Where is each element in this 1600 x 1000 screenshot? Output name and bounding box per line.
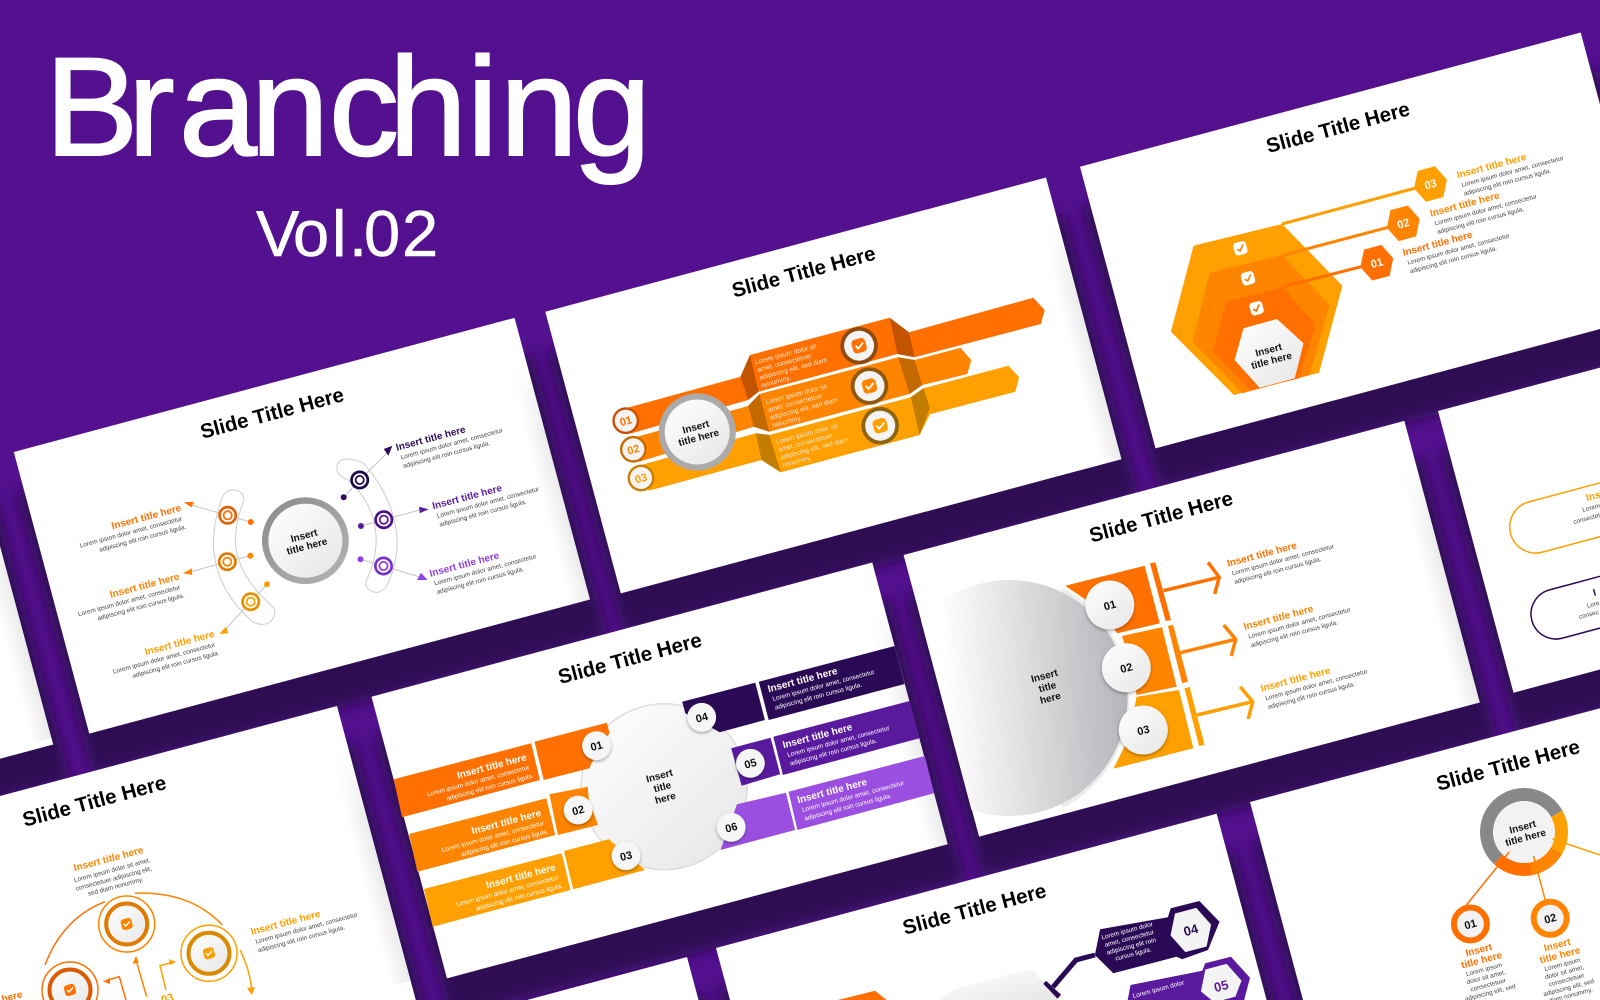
branch text 01: Lorem ipsum [1465,962,1503,978]
bar text right: Insert title here [796,777,869,806]
callout 04: 04 [1182,921,1200,939]
right text block: Lorem ipsum dolor amet, consectetur [255,911,359,946]
number badges: 03 [619,849,634,864]
band body text: nonummy. [761,375,792,389]
right text blocks [395,415,543,597]
center circle: Insert [681,419,711,436]
bar text left: Insert title here [456,752,528,781]
purple pill: Lore [1586,600,1600,610]
number circles: 02 [1119,661,1134,676]
slide title: Slide Title Here [729,242,878,302]
band body text: amet, consectetuer [767,392,824,414]
nested hexagons [1171,224,1342,395]
orange bars [394,723,645,927]
number rings: 02 [1543,912,1558,927]
arrowheads [183,446,429,634]
band 03 [641,366,1019,491]
big circle [581,704,747,870]
right text blocks: Lorem ipsum dolor amet, consectetur [436,486,541,520]
bar text left: Insert title here [485,862,557,891]
bar text left: adipiscing elit roin cursus ligula. [475,882,564,913]
text blocks: adipiscing elit roin cursus ligula. [1234,556,1322,586]
center hexagon: Insert [1254,342,1284,359]
band body text: adipiscing elit, sed diam [780,436,850,461]
branch text 02: consectetuer [1548,972,1586,988]
branch text 01: title here [1460,950,1504,971]
bar text right: adipiscing elit roin cursus ligula. [789,738,878,768]
bar text right: Lorem ipsum dolor amet, consectetur [801,780,906,814]
band body text: adipiscing elit, sed diam [769,397,839,422]
number rings [1454,902,1567,940]
band body text [755,341,852,469]
band body text: Lorem ipsum dolor sit [765,383,828,406]
center circle [262,497,349,584]
purple bars [682,646,934,850]
slide: half circle with arrows [892,421,1480,837]
connector [1044,955,1095,997]
right text blocks: Insert title here [395,424,467,454]
bar text left: adipiscing elit roin cursus ligula. [460,828,549,858]
callout 04: Lorem ipsum dolor [1101,921,1155,941]
text blocks: adipiscing elit roin cursus ligula. [1409,245,1498,275]
text blocks: Insert title here [1402,230,1474,259]
target nodes [218,470,393,611]
slide: circle with six bars [372,563,948,978]
slide title: Slide Title Here [556,629,704,689]
slide: off-canvas bottom slide [527,957,698,1000]
bar text left: Insert title here [470,808,543,837]
band body text: nonummy. [782,454,813,469]
branch lines [1466,839,1600,905]
main title: Branching [45,28,651,185]
top text block: Lorem ipsum dolor sit amet, [73,857,152,884]
flow arcs [45,893,252,1000]
slide title: Slide Title Here [20,771,169,832]
slide: hexagon callouts [716,814,1267,1000]
text blocks: Lorem ipsum dolor amet, consectetur [1461,155,1565,189]
slide: nested hexagons [1080,32,1600,448]
band body text: adipiscing elit, sed diam [759,357,829,382]
branch text 02: title here [1539,945,1582,966]
bar text right: adipiscing elit roin cursus ligula. [774,682,863,712]
number hexagons: 03 [1423,178,1438,192]
text blocks: Insert title here [1243,604,1315,633]
callout 05 [1128,957,1250,1000]
center circle [659,393,736,471]
left text blocks: Insert title here [109,571,181,601]
donut center: Insert [1508,819,1538,836]
center circle: Insert [290,527,319,545]
center circle: title here [677,427,721,449]
bar text right: Insert title here [782,722,854,751]
number badges: 04 [694,711,710,726]
half circle label: title [1038,680,1058,695]
top text block: sed diam nonummy. [87,876,144,898]
number badges: 02 [571,804,586,818]
bar text right: Lorem ipsum dolor amet, consectetur [787,725,891,759]
slide: pill outlines right edge [1438,368,1600,693]
number circles: 01 [1103,599,1118,613]
text blocks: Lorem ipsum dolor amet, consectetur [1231,543,1336,577]
band body text: Lorem ipsum dolor sit [776,423,838,446]
donut center: title here [1504,827,1548,849]
half circle label: Insert [1030,668,1060,685]
text blocks: Insert title here [1456,152,1528,181]
number badges [564,703,765,870]
bars [1150,562,1204,746]
right text blocks: adipiscing elit roin cursus ligula. [402,440,491,470]
orange shape fragment [838,991,887,1000]
top text block: Insert title here [73,845,145,874]
right text blocks: Lorem ipsum dolor amet, consectetur [434,553,538,587]
text blocks: adipiscing elit roin cursus ligula. [1250,619,1339,649]
number circles [1085,580,1168,754]
slide: 3D arrow bands [545,178,1122,593]
bar text right: Insert title here [767,666,839,695]
number badges [612,407,654,491]
slide title: Slide Title Here [198,383,346,444]
slide: donut with branches [1250,708,1600,1000]
left text blocks: Lorem ipsum dolor amet, consectetur [112,641,217,676]
slide: radial branch with arcs [14,318,590,734]
bar text left: adipiscing elit roin cursus ligula. [446,772,535,803]
text blocks: Insert title here [1226,540,1299,570]
text blocks [1226,531,1372,712]
slide title: Slide Title Here [1087,487,1235,547]
number hexagons [1356,164,1451,283]
right text blocks: adipiscing elit roin cursus ligula. [436,566,525,596]
check badges [840,327,899,445]
connector lines [190,452,420,630]
top text block [73,845,153,898]
branch text 01: Insert [1464,942,1494,959]
bar text right: adipiscing elit roin cursus ligula. [804,793,892,823]
check icons [1232,240,1265,316]
text blocks [1402,143,1568,276]
center circle: title here [286,536,329,558]
callout 04: adipiscing elit roin [1106,937,1157,957]
branch text 02: adipiscing elit, sed [1543,978,1595,998]
bar text left: Lorem ipsum dolor amet, consectetur [456,874,560,908]
number badges: 03 [634,472,649,486]
callout 05: Lorem ipsum dolor [1132,979,1186,1000]
text blocks: adipiscing elit roin cursus ligula. [1436,206,1525,236]
bar text left [423,752,564,917]
number badges: 01 [589,739,604,754]
right capsule arc [337,459,397,592]
half circle label: here [1039,691,1063,707]
number rings: 01 [1463,918,1478,932]
branch text 02: dolor sit amet, [1544,964,1585,981]
orange pill [1504,481,1600,559]
right text block: Insert title here [250,909,322,938]
left text blocks [74,503,221,684]
band 01 [626,298,1045,433]
subtitle: Vol.02 [256,197,438,270]
text blocks: Lorem ipsum dolor amet, consectetur [1434,193,1539,227]
number badges: 01 [618,414,633,429]
left text blocks: adipiscing elit roin cursus ligula. [97,592,186,622]
left text blocks: Lorem ipsum dolor amet, consectetur [79,515,184,550]
number badges: 02 [626,443,641,458]
big circle: title [653,780,673,795]
bar text right [767,657,908,823]
bar text left: Lorem ipsum dolor amet, consectetur [441,820,546,854]
number hexagons: 01 [1370,256,1385,271]
right text blocks: Lorem ipsum dolor amet, consectetur [400,427,505,461]
right text blocks: Insert title here [431,483,504,512]
branch text 01: dolor sit amet, [1466,969,1507,986]
band 02 [631,348,971,462]
right text block: adipiscing elit roin cursus ligula. [257,924,346,954]
big circle: here [654,791,678,807]
band body text: amet, consectetuer [757,352,813,374]
text blocks: Lorem ipsum dolor amet, consectetur [1407,232,1511,267]
purple pill [1525,574,1600,645]
text blocks: Insert title here [1260,665,1332,695]
band body text: amet, consectetuer [778,432,834,454]
slide: circular flow bottom left [0,706,416,1000]
slide title: Slide Title Here [1434,735,1582,796]
branch text 01: consectetuer [1470,977,1508,993]
callout 04 [1095,901,1220,973]
number badges: 06 [724,821,739,836]
ring icons [42,896,237,1000]
band body text: Lorem ipsum dolor sit [755,343,817,366]
callout 05: 05 [1212,977,1230,995]
left text blocks: Insert title here [144,629,216,658]
text blocks: adipiscing elit roin cursus ligula. [1267,681,1356,711]
number badges: 05 [743,757,758,772]
left text blocks: Insert title here [110,503,183,532]
slide title: Slide Title Here [900,879,1049,940]
dots [247,494,364,587]
bar text right: Lorem ipsum dolor amet, consectetur [772,669,876,703]
center hexagon [940,970,1059,1000]
number hexagons: 02 [1396,217,1411,232]
center hexagon [1235,319,1304,388]
band body text: nonummy. [771,415,803,429]
circle halo [1062,591,1127,805]
purple pill: consec [1578,609,1600,621]
left text blocks: adipiscing elit roin cursus ligula. [98,524,187,554]
left text blocks: Lorem ipsum dolor amet, consectetur [77,584,182,618]
branch text 02: Lorem ipsum [1544,957,1581,973]
left text blocks: adipiscing elit roin cursus ligula. [132,650,221,680]
text blocks: Lorem ipsum dolor amet, consectetur [1265,668,1369,702]
right text blocks: adipiscing elit roin cursus ligula. [439,499,527,529]
big circle: Insert [645,768,675,785]
left capsule arc [213,490,275,624]
arrowheads [103,956,255,995]
slide title: Slide Title Here [1264,98,1412,158]
number circles: 03 [1136,724,1151,738]
donut ring [1487,795,1562,870]
callout 04: cursus ligula. [1115,946,1153,963]
text blocks: Insert title here [1429,190,1501,220]
orange wedges [1065,566,1193,769]
text blocks: Lorem ipsum dolor amet, consectetur [1248,606,1352,641]
center hexagon: title here [1250,350,1294,372]
arrows [1163,562,1253,719]
connector lines [1282,184,1430,287]
right text blocks: Insert title here [428,550,501,580]
top text block: consectetuer adipiscing elit, [75,865,153,893]
bar text left: Lorem ipsum dolor amet, consectetur [426,764,531,798]
gray half circle [921,580,1128,816]
donut center [1494,802,1554,862]
purple pill: I [1592,587,1598,599]
slide: off-canvas left slide [0,506,53,759]
callout 04: amet, consectetur [1104,929,1156,949]
text blocks: adipiscing elit roin cursus ligula. [1463,168,1552,198]
branch text 02: Insert [1543,937,1573,954]
